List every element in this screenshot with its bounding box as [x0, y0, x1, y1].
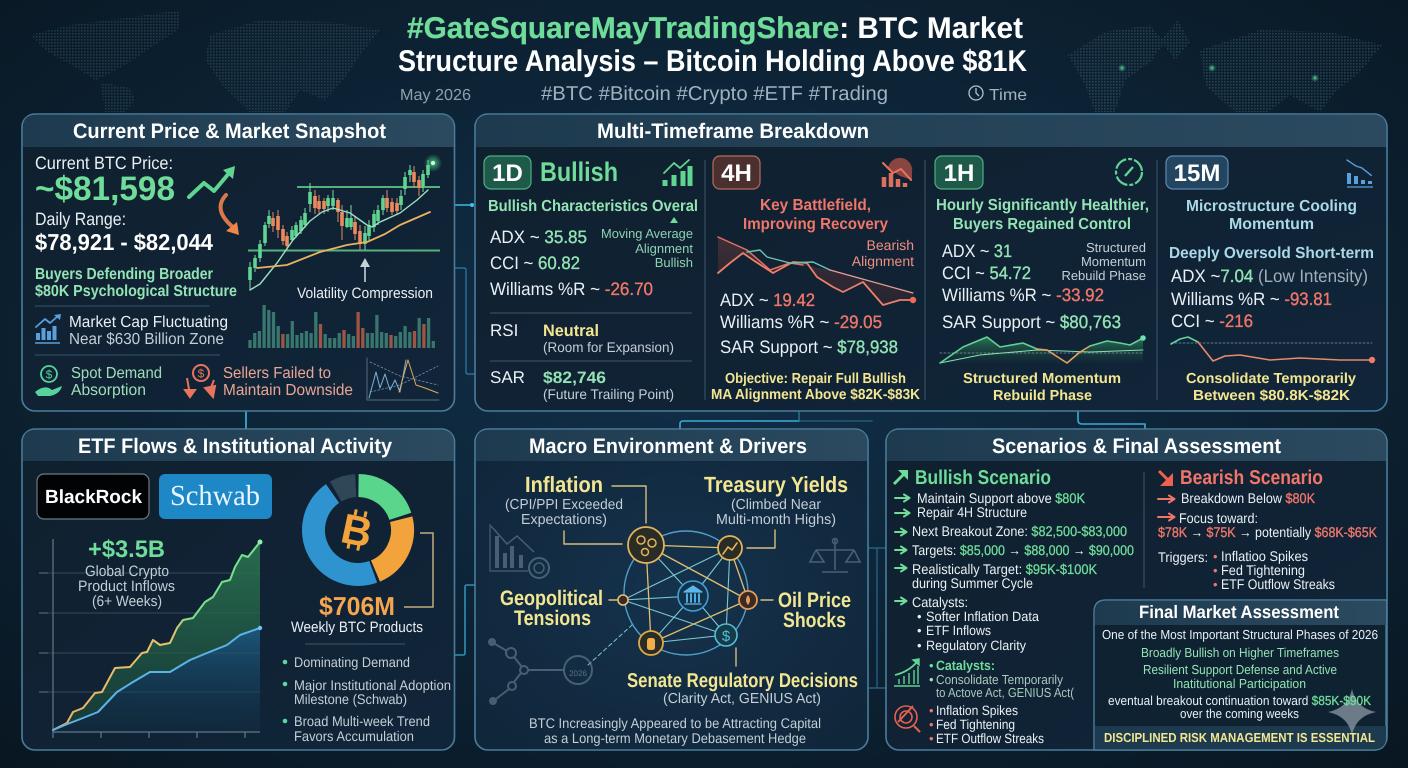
senate label: Senate Regulatory Decisions	[627, 670, 858, 692]
badge 15M	[1166, 156, 1228, 189]
RSI row: (Room for Expansion)	[543, 339, 674, 355]
subhead: Hourly Significantly Healthier,	[936, 197, 1149, 214]
risk bullets: •	[929, 717, 934, 732]
node: yields	[718, 536, 742, 560]
risk bullets: Inflation Spikes	[936, 703, 1018, 718]
structured note: Structured	[1086, 240, 1146, 255]
SAR row: $82,746	[543, 369, 606, 387]
bearish lines: $78K → $75K → potentially $68K-$65K	[1158, 524, 1378, 540]
ETF bullets: Milestone (Schwab)	[294, 691, 407, 707]
1H conclusion: Rebuild Phase	[993, 388, 1092, 404]
node: capital	[639, 631, 663, 655]
triggers	[1158, 548, 1335, 592]
heading: Multi-Timeframe Breakdown	[597, 120, 869, 143]
final lines: Broadly Bullish on Higher Timeframes	[1141, 645, 1339, 660]
structured note: Rebuild Phase	[1061, 268, 1146, 283]
icon: bitcoin: B	[337, 504, 377, 557]
bearish lines	[1158, 490, 1378, 540]
risk bullets	[929, 703, 1044, 746]
world map left	[30, 10, 380, 112]
treasury label	[704, 472, 848, 528]
second catalysts: to Actove Act, GENIUS Act(	[936, 685, 1075, 700]
risk banner: DISCIPLINED RISK MANAGEMENT IS ESSENTIAL	[1104, 730, 1375, 745]
triggers: Fed Tightening	[1221, 562, 1305, 578]
inflation label: Expectations)	[521, 512, 607, 528]
inflow caption: Product Inflows	[78, 578, 175, 595]
title line 1: #GateSquareMayTradingShare: BTC Market	[407, 12, 1023, 45]
arrows	[895, 494, 910, 604]
triggers: •	[1213, 549, 1218, 564]
indicators	[490, 227, 653, 299]
ETF bullets	[283, 654, 451, 744]
oil label: Oil Price	[778, 589, 851, 612]
bullish lines: Catalysts:	[912, 594, 968, 610]
senate label: (Clarity Act, GENIUS Act)	[663, 691, 821, 707]
second catalysts: •	[929, 658, 934, 673]
subhead	[936, 197, 1149, 233]
bearish heading: Bearish Scenario	[1180, 467, 1323, 489]
indicators: Williams %R ~ -33.92	[942, 285, 1104, 305]
spot demand text: Spot Demand	[71, 365, 162, 382]
second catalysts: •	[929, 672, 934, 687]
catalyst bullets: •	[917, 638, 922, 653]
column: 1D	[484, 156, 698, 402]
inflow caption	[78, 563, 175, 610]
subhead: Key Battlefield,	[760, 197, 871, 214]
badge 1H	[935, 156, 983, 189]
bullish lines: Repair 4H Structure	[917, 504, 1027, 520]
indicators: Williams %R ~ -29.05	[720, 312, 882, 332]
1H line chart	[940, 335, 1146, 363]
bearish alignment label: Alignment	[852, 253, 914, 269]
buyers note: $80K Psychological Structure	[35, 283, 237, 300]
bullish lines: Maintain Support above $80K	[917, 490, 1086, 506]
indicators: ADX ~ 31	[942, 241, 1012, 261]
objective: Objective: Repair Full Bullish	[725, 371, 906, 387]
time label: Time	[989, 87, 1027, 104]
risk bullets: Fed Tightening	[936, 717, 1015, 732]
triggers: Inflatioo Spikes	[1221, 548, 1308, 564]
badge 4H	[713, 156, 760, 189]
badge 1H: 1H	[944, 160, 974, 187]
indicators	[942, 241, 1121, 332]
bearish alignment label: Bearish	[867, 237, 914, 253]
structured note: Momentum	[1081, 254, 1146, 269]
icon: up-right arrow	[894, 470, 908, 484]
icon: falling dollar	[185, 365, 215, 397]
15M line chart	[1171, 337, 1375, 363]
SAR row: (Future Trailing Point)	[543, 386, 674, 402]
panel: macro	[475, 429, 868, 750]
heading: Scenarios & Final Assessment	[992, 435, 1281, 458]
RSI row: RSI	[490, 321, 518, 340]
price label: Current BTC Price:	[35, 153, 173, 173]
indicators	[1171, 266, 1368, 331]
bearish alignment label	[852, 237, 914, 269]
mini pattern chart	[367, 358, 439, 400]
volatility label: Volatility Compression	[297, 285, 433, 302]
ETF bullets: Dominating Demand	[294, 654, 410, 670]
divider	[35, 306, 220, 355]
moving average note	[601, 226, 693, 270]
icon: spot demand: $	[46, 368, 53, 382]
geopolitical label: Tensions	[514, 607, 591, 630]
market cap text: Market Cap Fluctuating	[69, 314, 228, 331]
logo: Schwab	[159, 474, 272, 519]
buyers note	[35, 266, 237, 300]
buyers note: Buyers Defending Broader	[35, 266, 213, 283]
icon: growth chart	[894, 659, 920, 686]
icon: clock	[969, 86, 983, 100]
triggers: Triggers:	[1158, 549, 1208, 565]
volatility arrow	[360, 258, 370, 282]
macro network diagram	[564, 486, 775, 666]
indicators: ADX ~ 19.42	[720, 290, 815, 310]
RSI row	[490, 321, 674, 355]
SAR row: SAR	[490, 368, 525, 387]
final lines: over the coming weeks	[1180, 706, 1299, 721]
panel: final assessment	[1094, 600, 1386, 750]
inflow caption: (6+ Weeks)	[92, 593, 162, 610]
indicators: ADX ~7.04 (Low Intensity)	[1171, 266, 1368, 286]
bullish lines: Realistically Target: $95K-$100K	[912, 561, 1098, 577]
catalyst bullets	[917, 609, 1039, 653]
final lines: eventual breakout continuation toward $85K-$90K	[1108, 693, 1371, 708]
logo: BlackRock	[37, 474, 149, 519]
column: 4H	[711, 156, 920, 403]
bearish scenario	[1158, 467, 1378, 592]
icon: ghost bar chart	[490, 524, 549, 578]
volume bars	[250, 305, 433, 348]
geopolitical label	[500, 587, 603, 630]
SAR row	[490, 368, 674, 402]
subhead: Bullish Characteristics Overal	[488, 198, 698, 215]
bullish label: Bullish	[540, 157, 618, 187]
hedge note: BTC Increasingly Appeared to be Attracting Capital	[529, 715, 821, 731]
node: regulation: $	[722, 628, 731, 645]
RSI row: Neutral	[543, 322, 599, 340]
title line 2: Structure Analysis – Bitcoin Holding Above $81K	[398, 45, 1027, 78]
icon: red magnifier	[895, 706, 920, 732]
15M conclusion: Between $80.8K-$82K	[1193, 388, 1351, 404]
badge 4H: 4H	[721, 160, 752, 187]
icon: gauge	[1116, 159, 1142, 185]
badge 15M: 15M	[1174, 160, 1220, 187]
ETF bullets: Major Institutional Adoption	[294, 677, 451, 693]
bullish lines: Next Breakout Zone: $82,500-$83,000	[912, 523, 1127, 539]
map highlight points	[1118, 64, 1319, 82]
final lines	[1102, 627, 1378, 721]
subhead: Buyers Regained Control	[953, 216, 1131, 233]
heading: Current Price & Market Snapshot	[73, 120, 386, 143]
heading: ETF Flows & Institutional Activity	[78, 435, 392, 458]
donut chart	[313, 486, 403, 574]
catalyst bullets: Regulatory Clarity	[926, 638, 1026, 653]
bracket	[404, 533, 433, 607]
spot demand text: Absorption	[71, 382, 146, 399]
sellers text	[223, 365, 353, 399]
catalyst bullets: •	[917, 623, 922, 638]
final lines: Resilient Support Defense and Active	[1143, 662, 1337, 677]
4H line chart	[718, 237, 916, 305]
oil label	[778, 589, 851, 632]
subhead: Improving Recovery	[743, 216, 888, 233]
hedge note	[529, 715, 821, 746]
triggers: ETF Outflow Streaks	[1221, 576, 1335, 592]
inflow area chart	[39, 539, 262, 738]
bearish arrows	[1158, 496, 1174, 520]
geopolitical label: Geopolitical	[500, 587, 603, 610]
subhead: Microstructure Cooling	[1186, 198, 1357, 215]
icon: down bars	[883, 158, 912, 187]
moving average note: Bullish	[655, 255, 693, 270]
inflation label: (CPI/PPI Exceeded	[505, 497, 623, 513]
moving average note: Alignment	[635, 241, 693, 256]
objective	[711, 371, 920, 403]
header	[398, 12, 1027, 105]
market cap text	[69, 314, 228, 348]
triggers: •	[1213, 577, 1218, 592]
icon: ghost network	[489, 639, 592, 704]
icon: orange curved arrow	[221, 195, 239, 235]
sparkle	[1328, 689, 1376, 735]
bullish heading: Bullish Scenario	[915, 467, 1051, 489]
objective: MA Alignment Above $82K-$83K	[711, 387, 920, 403]
panel: ETF flows	[22, 429, 454, 750]
panel: current price	[22, 114, 454, 411]
icon: spot demand	[35, 366, 62, 396]
badge 1D: 1D	[492, 160, 523, 187]
bullish lines: Targets: $85,000 → $88,000 → $90,000	[912, 542, 1134, 558]
column: 1H	[935, 156, 1149, 404]
subhead: Momentum	[1229, 216, 1314, 233]
final lines: Inatitutional Participation	[1173, 676, 1306, 691]
node: bank	[678, 581, 708, 611]
icon: falling dollar: $	[198, 366, 205, 380]
risk bullets: •	[929, 731, 934, 746]
badge 1D	[484, 156, 531, 189]
circuit connectors	[246, 203, 1145, 688]
treasury label: (Climbed Near	[731, 497, 821, 513]
15M conclusion: Consolidate Temporarily	[1186, 371, 1356, 387]
bullish lines: during Summer Cycle	[912, 575, 1033, 591]
icon: bars up	[664, 160, 690, 186]
indicators: SAR Support ~ $78,938	[720, 337, 898, 357]
BTC product value: $706M	[319, 591, 395, 621]
second catalysts: Consolidate Temporarily	[936, 672, 1063, 687]
logo: Schwab: Schwab	[170, 480, 260, 512]
moving average note: Moving Average	[601, 226, 693, 241]
node: regulation	[715, 624, 737, 646]
icon: small triangle	[670, 217, 678, 223]
world map right	[1068, 20, 1382, 112]
indicators: SAR Support ~ $80,763	[942, 312, 1121, 332]
catalyst bullets: Softer Inflation Data	[926, 609, 1039, 624]
sellers text: Sellers Failed to	[223, 365, 331, 382]
subhead	[743, 197, 888, 233]
final heading: Final Market Assessment	[1139, 602, 1339, 622]
inflation label: Inflation	[525, 472, 603, 497]
sellers text: Maintain Downside	[223, 382, 353, 399]
icon: down trend	[1347, 160, 1373, 187]
inflow caption: Global Crypto	[85, 563, 169, 580]
indicators: CCI ~ 60.82	[490, 253, 580, 273]
inflation label	[505, 472, 623, 528]
senate label	[627, 670, 858, 707]
final lines: One of the Most Important Structural Phases of 2026	[1102, 627, 1378, 642]
catalyst bullets: •	[917, 609, 922, 624]
structured note	[1061, 240, 1146, 283]
node: geopolitics	[618, 595, 628, 605]
indicators: CCI ~ -216	[1171, 311, 1253, 331]
daily range label: Daily Range:	[35, 209, 126, 229]
logo: BlackRock: BlackRock	[45, 487, 142, 508]
hashtags: #BTC #Bitcoin #Crypto #ETF #Trading	[541, 83, 888, 105]
panel: multi-timeframe	[475, 114, 1387, 411]
risk bullets: ETF Outflow Streaks	[936, 731, 1044, 746]
bullish lines	[912, 490, 1134, 610]
column dividers	[705, 160, 1157, 400]
market cap text: Near $630 Billion Zone	[69, 331, 224, 348]
column: 15M	[1166, 156, 1375, 404]
treasury label: Treasury Yields	[704, 472, 848, 497]
triggers: •	[1213, 563, 1218, 578]
heading: Macro Environment & Drivers	[529, 435, 807, 458]
daily range value: $78,921 - $82,044	[35, 229, 213, 255]
15M conclusion	[1186, 371, 1356, 404]
ETF bullets: Favors Accumulation	[294, 728, 414, 744]
indicators: Williams %R ~ -26.70	[490, 279, 653, 299]
second catalysts	[929, 658, 1075, 700]
catalyst bullets: ETF Inflows	[926, 623, 991, 638]
subhead	[1186, 198, 1357, 233]
bearish lines: Breakdown Below $80K	[1181, 490, 1316, 506]
BTC product caption: Weekly BTC Products	[291, 619, 423, 636]
spot demand text	[71, 365, 162, 399]
indicators: CCI ~ 54.72	[942, 263, 1031, 283]
bearish lines: Focus toward:	[1179, 510, 1258, 526]
second catalysts: Catalysts:	[936, 658, 995, 673]
icon: green up arrow	[189, 166, 235, 197]
indicators	[720, 290, 898, 357]
inflow value: +$3.5B	[88, 536, 165, 563]
icon: market cap	[35, 314, 61, 343]
panel: scenarios	[886, 429, 1387, 750]
bullish scenario	[894, 467, 1134, 746]
indicators: Williams %R ~ -93.81	[1171, 289, 1332, 309]
icon: down-right arrow	[1159, 471, 1173, 486]
ETF bullets: Broad Multi-week Trend	[294, 713, 430, 729]
price value: ~$81,598	[35, 170, 175, 208]
candlestick chart	[248, 154, 442, 290]
1H conclusion: Structured Momentum	[963, 371, 1121, 387]
oil label: Shocks	[783, 609, 846, 632]
risk bullets: •	[929, 703, 934, 718]
node: oil	[739, 591, 757, 609]
deeply oversold: Deeply Oversold Short-term	[1169, 245, 1374, 262]
hedge note: as a Long-term Monetary Debasement Hedge	[544, 730, 806, 746]
icon: ghost network: 2026	[569, 669, 587, 678]
treasury label: Multi-month Highs)	[716, 512, 836, 528]
1H conclusion	[963, 371, 1121, 404]
icon: ghost scales	[810, 538, 860, 572]
date: May 2026	[400, 87, 471, 104]
node: inflation	[628, 527, 664, 563]
indicators: ADX ~ 35.85	[490, 227, 587, 247]
